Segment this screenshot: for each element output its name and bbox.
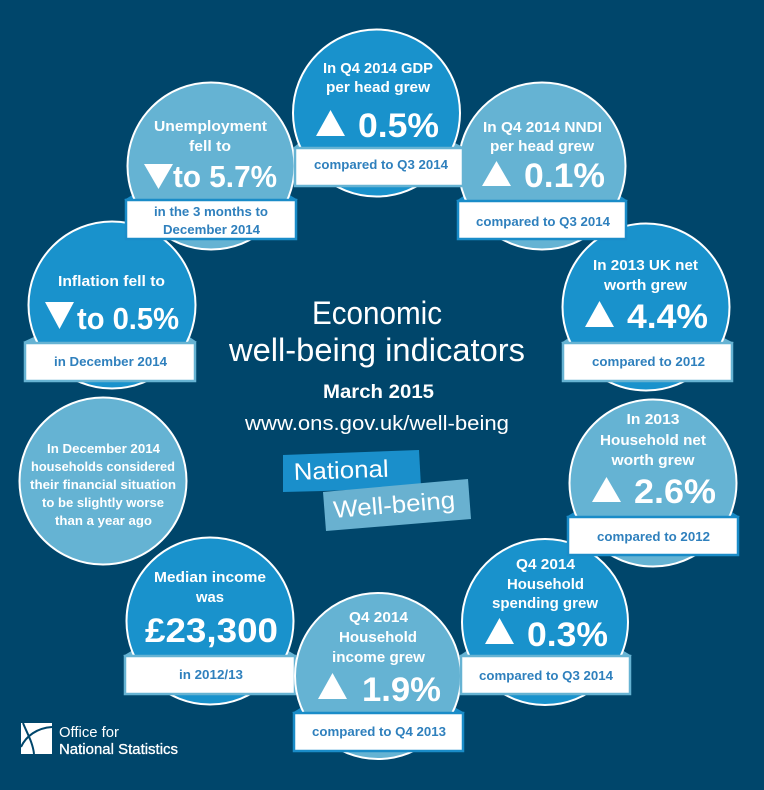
ribbon: household spending comparison: compared to Q3 2014: [479, 668, 614, 683]
heading: household spending: [492, 556, 598, 612]
ribbon: NNDI comparison: compared to Q3 2014: [476, 214, 611, 229]
ribbon: UK net worth comparison: compared to 2012: [592, 354, 705, 369]
icon: down triangle: [45, 302, 74, 329]
value: UK net worth: 4.4%: [627, 298, 708, 336]
panel: inflation: [23, 222, 197, 388]
ribbon: unemployment period: [126, 200, 296, 239]
ribbon: inflation period: in December 2014: [54, 354, 168, 369]
website link: www.ons.gov.uk/well-being: [244, 413, 509, 435]
badge: National: [283, 450, 421, 492]
ribbon: median income period: [125, 656, 295, 694]
icon: up triangle: [482, 161, 511, 186]
value: median income: £23,300: [145, 612, 278, 650]
heading: household income: Household: [339, 629, 417, 646]
ribbon: NNDI comparison: [458, 201, 626, 239]
ribbon: household income comparison: compared to Q4 2013: [312, 724, 446, 739]
heading: UK net worth: worth grew: [603, 277, 687, 294]
ribbon: UK net worth comparison: [563, 343, 732, 381]
ribbon: household net worth comparison: [568, 517, 738, 555]
ribbon: unemployment period: in the 3 months to: [154, 204, 268, 219]
text: financial situation statement: to be slightly worse: [42, 495, 164, 510]
heading: GDP per head: In Q4 2014 GDP: [323, 60, 433, 77]
heading: UK net worth: [593, 257, 698, 294]
icon: up triangle: [318, 673, 347, 699]
panel: median income: [123, 538, 297, 704]
title: well-being indicators: [228, 332, 525, 368]
text: financial situation statement: than a year ago: [55, 513, 152, 528]
text: financial situation statement: In December 2014: [47, 441, 161, 456]
title: Economic: [312, 295, 442, 331]
heading: GDP per head: per head grew: [326, 79, 430, 96]
panel: household income: [292, 593, 465, 759]
heading: GDP per head: [323, 60, 433, 96]
heading: NNDI per head: In Q4 2014 NNDI: [483, 119, 602, 136]
date: March 2015: [323, 382, 434, 403]
heading: inflation: Inflation fell to: [58, 273, 165, 290]
badge: National: National: [293, 456, 389, 486]
title: [228, 295, 525, 368]
panel: NNDI per head: [456, 82, 628, 250]
heading: median income: Median income: [154, 569, 266, 586]
badge: Well-being: [323, 479, 471, 531]
heading: household net worth: worth grew: [610, 452, 695, 469]
heading: unemployment: Unemployment: [154, 118, 267, 135]
panel: GDP per head: [293, 30, 465, 196]
value: NNDI per head: 0.1%: [524, 157, 605, 195]
ribbon: unemployment period: December 2014: [163, 222, 261, 237]
heading: household spending: Household: [507, 576, 584, 593]
ribbon: household net worth comparison: compared to 2012: [597, 529, 710, 544]
ribbon: GDP comparison: compared to Q3 2014: [314, 157, 449, 172]
logo: Office for National Statistics: [21, 723, 178, 758]
panel: household spending: [459, 539, 632, 705]
heading: household net worth: [600, 411, 706, 469]
heading: median income: [154, 569, 266, 606]
heading: NNDI per head: per head grew: [490, 138, 594, 155]
ribbon: inflation period: [25, 343, 195, 381]
ribbon: household income comparison: [294, 713, 463, 751]
icon: up triangle: [316, 110, 345, 136]
ribbon: median income period: in 2012/13: [179, 667, 243, 682]
heading: unemployment: fell to: [189, 138, 231, 155]
heading: household income: [332, 609, 425, 666]
heading: median income: was: [195, 589, 224, 606]
heading: household income: income grew: [332, 649, 425, 666]
logo: Office for National Statistics: Office for: [59, 725, 119, 741]
heading: NNDI per head: [483, 119, 602, 155]
value: household income: 1.9%: [362, 671, 441, 709]
value: household net worth: 2.6%: [634, 473, 716, 511]
icon: up triangle: [585, 301, 614, 327]
value: household spending: 0.3%: [527, 616, 608, 654]
heading: unemployment: [154, 118, 267, 155]
badge: Well-being: Well-being: [332, 487, 456, 524]
ribbon: household spending comparison: [461, 656, 630, 694]
heading: household spending: Q4 2014: [516, 556, 576, 573]
icon: ONS mark: [21, 723, 52, 754]
panel: household net worth: [566, 400, 740, 566]
panel: UK net worth: [561, 224, 734, 390]
icon: up triangle: [485, 618, 514, 644]
text: financial situation statement: their financial situation: [30, 477, 176, 492]
value: unemployment: to 5.7%: [173, 159, 277, 194]
heading: household income: Q4 2014: [349, 609, 409, 626]
badge: National Well-being: [283, 450, 471, 531]
panel: financial situation: [20, 398, 186, 564]
icon: up triangle: [592, 477, 621, 502]
ribbon: GDP comparison: [295, 148, 463, 186]
text: financial situation statement: [30, 441, 176, 528]
icon: down triangle: [144, 164, 173, 189]
value: inflation: to 0.5%: [77, 301, 179, 336]
heading: household spending: spending grew: [492, 595, 598, 612]
heading: household net worth: Household net: [600, 432, 706, 449]
logo: Office for National Statistics: National Statistics: [59, 742, 178, 758]
text: financial situation statement: households considered: [31, 459, 175, 474]
value: GDP per head: 0.5%: [358, 107, 439, 145]
panel: unemployment: [124, 82, 298, 250]
heading: UK net worth: In 2013 UK net: [593, 257, 698, 274]
heading: household net worth: In 2013: [626, 411, 680, 428]
